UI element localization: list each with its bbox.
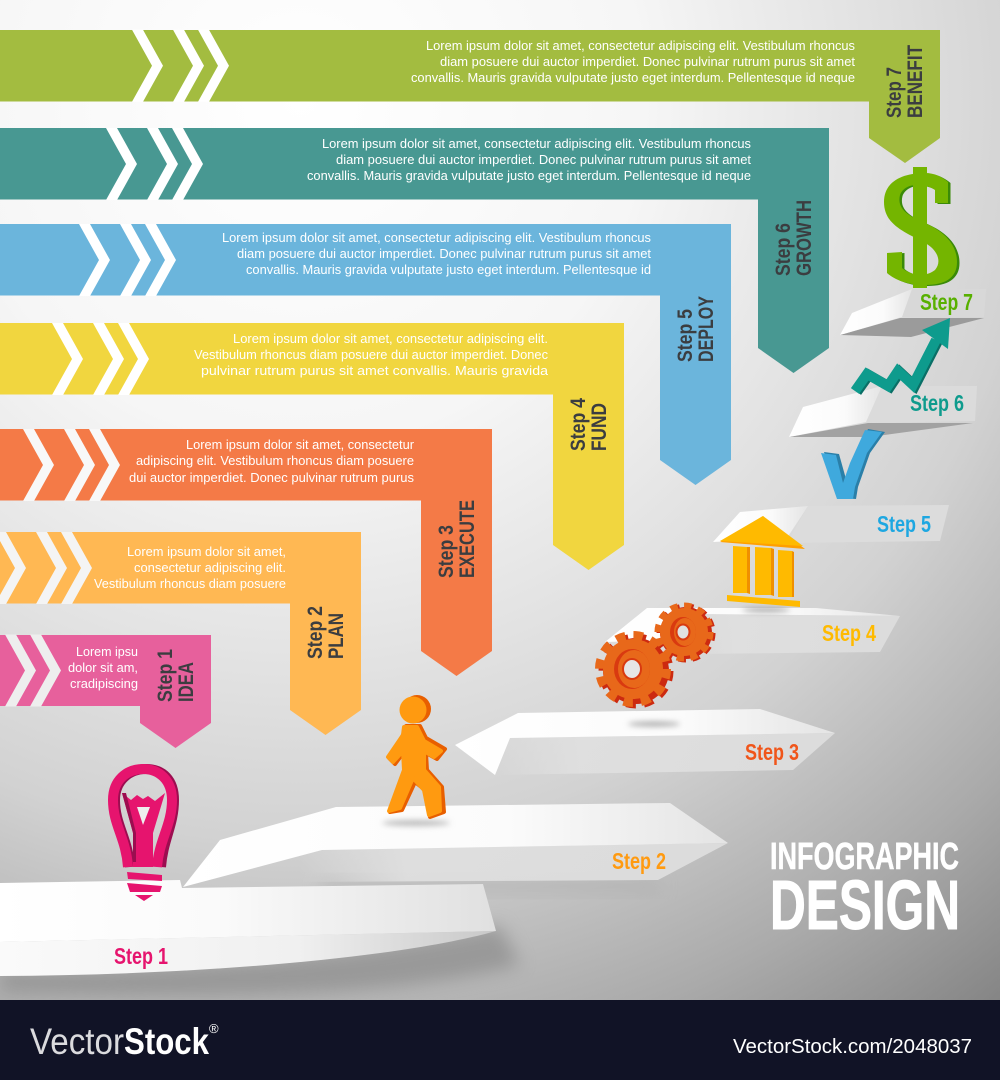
icon: large gear	[600, 636, 669, 704]
panel: step 3 execute banner	[0, 429, 492, 676]
step 5 description: convallis. Mauris gravida vulputate justo eget interdum. Pellentesque id	[246, 263, 651, 277]
step 6 description: convallis. Mauris gravida vulputate justo eget interdum. Pellentesque id neque	[307, 169, 751, 183]
step 1 description: cradipiscing	[70, 677, 138, 691]
step 5 tag	[674, 296, 718, 362]
step 2 label: Step 2	[612, 848, 666, 874]
footer url: VectorStock.com/2048037	[733, 1036, 972, 1058]
step 5 tag: DEPLOY	[695, 296, 718, 362]
footer logo: VectorStock	[30, 1021, 225, 1062]
step 2 description: Vestibulum rhoncus diam posuere	[94, 577, 286, 591]
step 4 platform	[605, 608, 900, 654]
step 7 tag: BENEFIT	[904, 45, 927, 118]
step 1 description: Lorem ipsu	[76, 645, 138, 659]
step 6 tag: GROWTH	[793, 200, 816, 276]
title	[770, 836, 960, 944]
step 7 platform	[840, 289, 986, 337]
step 2 tag: Step 2	[304, 606, 327, 659]
step 4 tag: Step 4	[567, 398, 590, 451]
step 4 tag: FUND	[588, 403, 611, 451]
icon: bank building	[720, 516, 805, 612]
icon: check mark	[821, 429, 885, 499]
step 3 platform	[455, 709, 835, 775]
panel: step 7 benefit banner	[0, 30, 940, 163]
step 6 platform	[789, 386, 977, 437]
panel: step 6 growth banner	[0, 128, 829, 373]
icon: rising arrow	[855, 318, 950, 392]
step 2 description: Lorem ipsum dolor sit amet,	[127, 545, 286, 559]
step 3 description	[129, 438, 414, 485]
footer band	[0, 1000, 1000, 1080]
panel: step 2 plan banner	[0, 532, 361, 735]
step 4 description: Vestibulum rhoncus diam posuere dui auctor imperdiet. Donec	[194, 348, 548, 362]
step 3 tag: Step 3	[435, 525, 458, 578]
step 6 description: diam posuere dui auctor imperdiet. Donec pulvinar rutrum purus sit amet	[336, 153, 752, 167]
step 7 label: Step 7	[920, 289, 973, 315]
step 2 shadow	[382, 820, 450, 826]
step 2 tag: PLAN	[325, 613, 348, 659]
step 1 tag: Step 1	[154, 649, 177, 702]
step 3 tag	[435, 500, 479, 578]
step 7 tag: Step 7	[883, 67, 906, 118]
step 4 description: Lorem ipsum dolor sit amet, consectetur adipiscing elit.	[233, 332, 548, 346]
step 5 description	[222, 231, 652, 277]
step 6 tag: Step 6	[772, 223, 795, 276]
step 7 tag	[883, 45, 927, 118]
step 6 tag	[772, 200, 816, 276]
step 7 description	[411, 39, 856, 85]
step 1 description	[68, 645, 138, 691]
panel: step 5 deploy banner	[0, 224, 731, 485]
step 4 description: pulvinar rutrum purus sit amet convallis. Mauris gravida	[201, 364, 548, 378]
step 3 tag: EXECUTE	[456, 500, 479, 578]
step 7 description: diam posuere dui auctor imperdiet. Donec pulvinar rutrum purus sit amet	[440, 55, 856, 69]
step 5 platform	[713, 505, 949, 543]
step 7 description: Lorem ipsum dolor sit amet, consectetur adipiscing elit. Vestibulum rhoncus	[426, 39, 855, 53]
step 3 shadow	[628, 722, 680, 726]
step 6 description	[307, 137, 752, 183]
footer logo: ®	[209, 1021, 219, 1036]
icon: dollar sign	[884, 167, 960, 288]
step 2 description	[94, 545, 286, 591]
step 4 description	[194, 332, 548, 378]
step 1 tag: IDEA	[175, 662, 198, 702]
step 1 description: dolor sit am,	[68, 661, 138, 675]
icon: small gear	[658, 606, 712, 659]
step 3 description: Lorem ipsum dolor sit amet, consectetur	[186, 438, 414, 452]
step 6 label: Step 6	[910, 390, 964, 416]
step 1 tag	[154, 649, 198, 702]
step 3 label: Step 3	[745, 739, 799, 765]
step 5 label: Step 5	[877, 511, 931, 537]
step 5 tag: Step 5	[674, 309, 697, 362]
icon: light bulb	[113, 769, 174, 901]
step 1 platform	[0, 880, 520, 996]
panel: step 1 idea banner	[0, 634, 211, 748]
step 2 description: consectetur adipiscing elit.	[134, 561, 286, 575]
step 7 description: convallis. Mauris gravida vulputate justo eget interdum. Pellentesque id neque	[411, 71, 855, 85]
step 2 tag	[304, 606, 348, 659]
icon: walking person	[388, 695, 445, 817]
step 6 description: Lorem ipsum dolor sit amet, consectetur adipiscing elit. Vestibulum rhoncus	[322, 137, 751, 151]
step 3 description: adipiscing elit. Vestibulum rhoncus diam posuere	[136, 454, 414, 468]
step 4 tag	[567, 398, 611, 451]
panel: step 4 fund banner	[0, 323, 624, 570]
step 1 label: Step 1	[114, 943, 168, 969]
step 3 description: dui auctor imperdiet. Donec pulvinar rutrum purus	[129, 471, 414, 485]
step 5 description: diam posuere dui auctor imperdiet. Donec pulvinar rutrum purus sit amet	[237, 247, 652, 261]
step 5 description: Lorem ipsum dolor sit amet, consectetur adipiscing elit. Vestibulum rhoncus	[222, 231, 651, 245]
step 2 platform	[183, 803, 728, 892]
step 4 label: Step 4	[822, 620, 876, 646]
